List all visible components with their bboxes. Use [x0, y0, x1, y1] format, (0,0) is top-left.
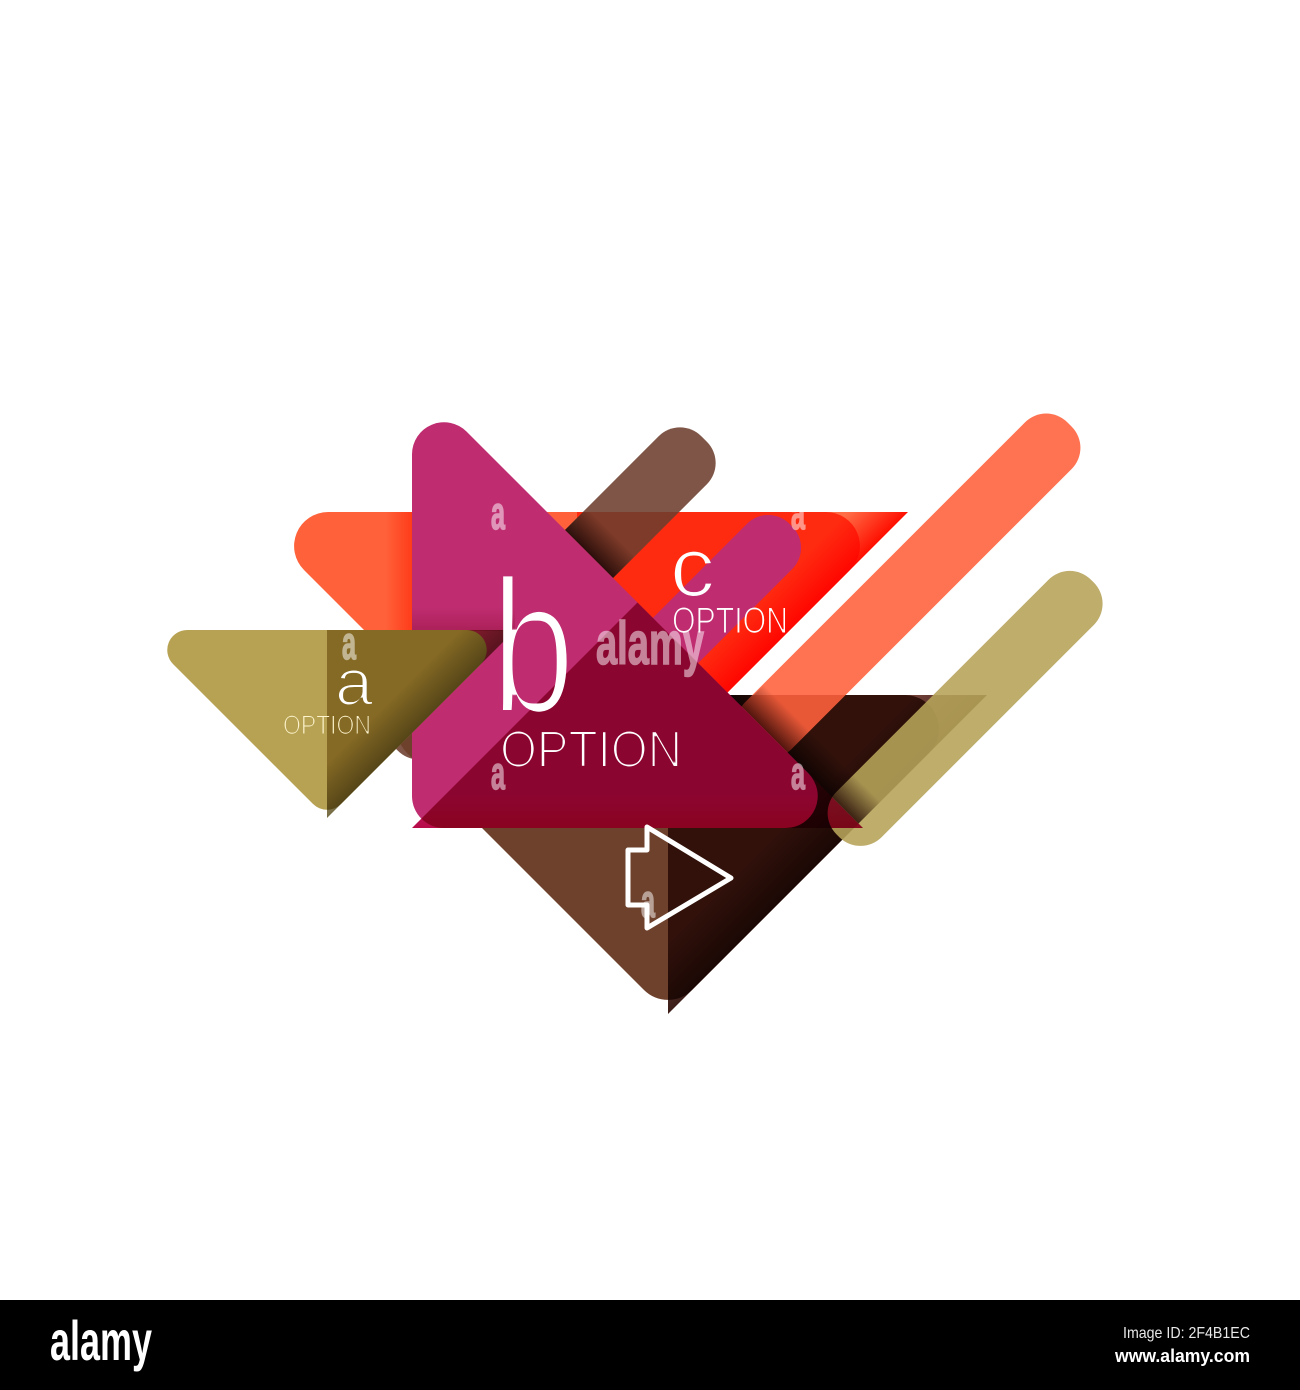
shadow cast by option b triangle — [565, 512, 878, 824]
bar: brown diagonal — [371, 415, 728, 772]
watermark: a — [791, 747, 805, 799]
footer bar — [0, 1300, 1300, 1390]
letter a with label: a — [335, 645, 373, 719]
icon: outlined arrow — [628, 827, 731, 928]
watermark: a — [791, 487, 805, 539]
panel: arrow triangle — [397, 695, 987, 1014]
footer bar: www.alamy.com — [1114, 1346, 1250, 1366]
letter c with label — [670, 520, 788, 641]
panel: option b triangle — [412, 422, 863, 828]
letter c with label: OPTION — [672, 600, 788, 641]
letter a with label: OPTION — [283, 710, 371, 740]
watermark: a — [641, 875, 655, 927]
letter a with label — [283, 645, 373, 740]
panel: option c triangle — [294, 512, 908, 692]
letter b with label: b — [491, 541, 575, 753]
bar: magenta diagonal — [620, 503, 813, 696]
letter c with label: c — [670, 520, 715, 614]
letter b with label: OPTION — [500, 721, 682, 779]
bar: peach diagonal — [724, 401, 1093, 770]
footer bar: alamy — [50, 1309, 152, 1372]
watermark: alamy — [596, 610, 704, 677]
watermark: a — [491, 487, 505, 539]
letter b with label — [491, 541, 682, 779]
watermark: a — [342, 617, 356, 669]
watermark: a — [491, 747, 505, 799]
panel: option a triangle — [167, 630, 515, 818]
footer bar: Image ID: 2F4B1EC — [1123, 1325, 1250, 1342]
bar: olive diagonal — [815, 558, 1115, 858]
watermark — [342, 487, 805, 927]
